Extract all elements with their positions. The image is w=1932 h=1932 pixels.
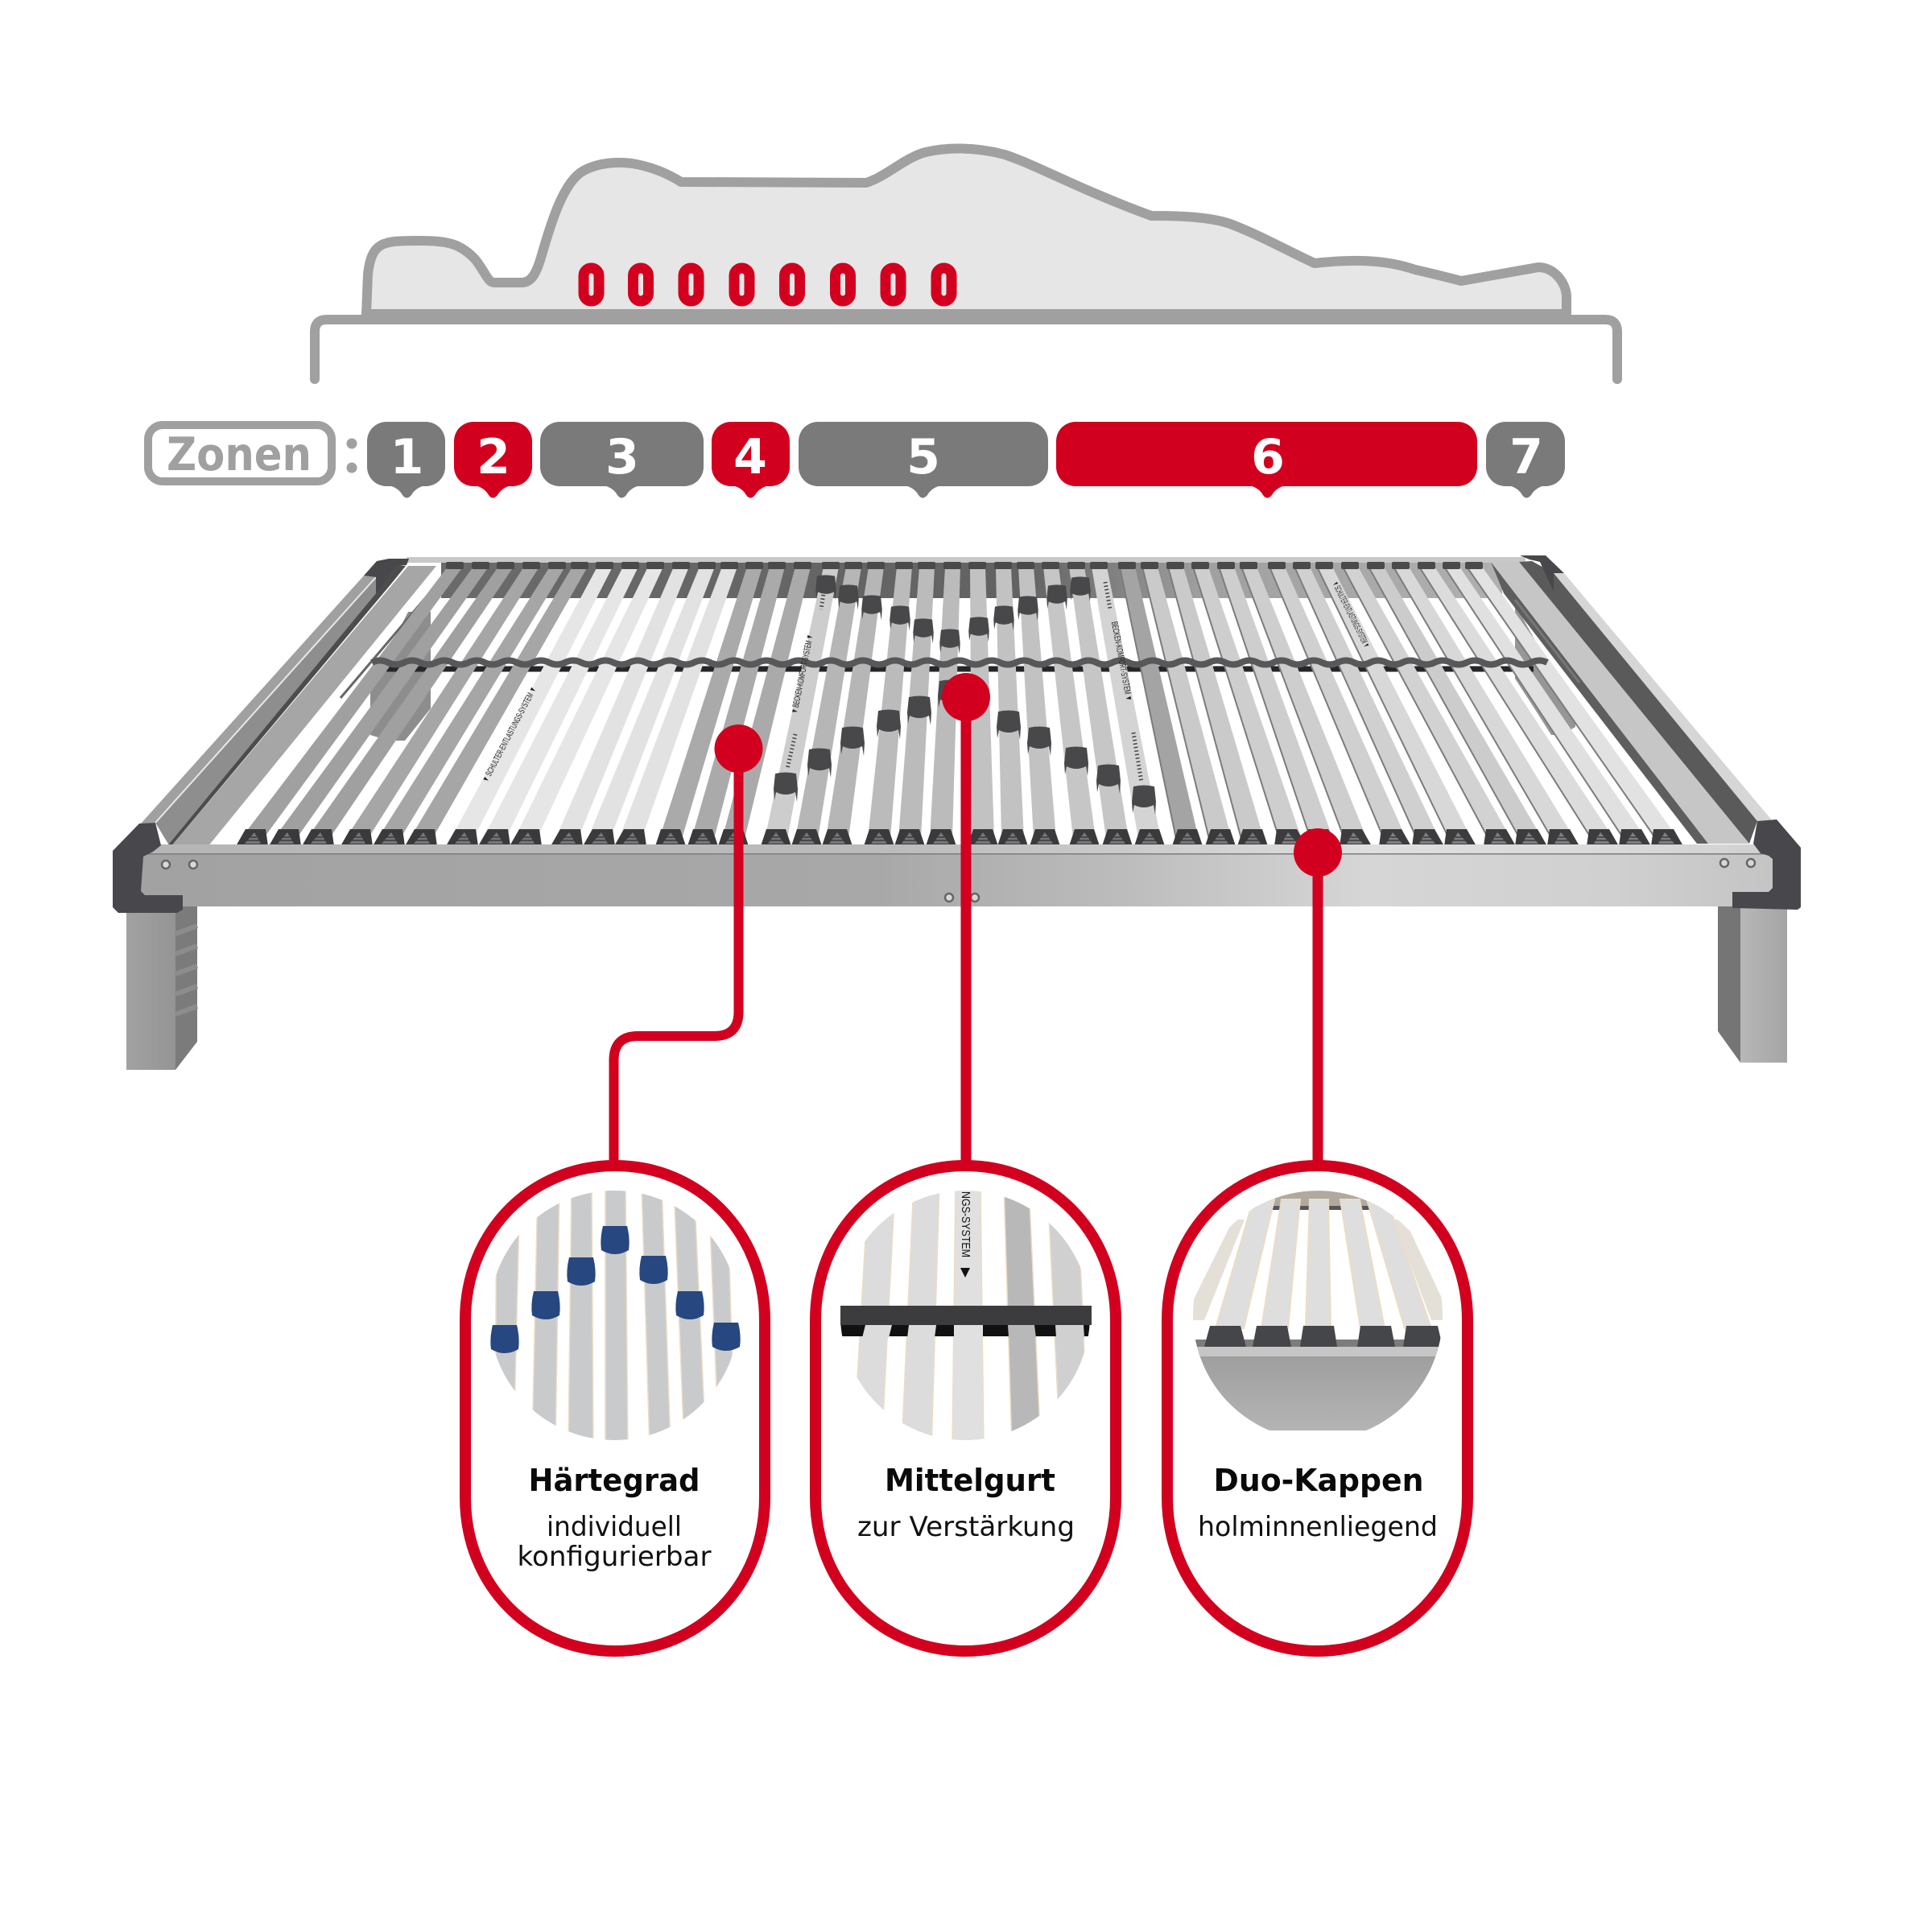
zone 1 [367, 422, 445, 497]
front slat caps [236, 829, 1683, 846]
back rail [407, 557, 1525, 563]
zone 2: 2 [477, 429, 510, 485]
left support bracket [370, 612, 431, 741]
slat edges [1120, 567, 1656, 839]
zone 2 [454, 422, 532, 497]
zone 4: 4 [733, 429, 767, 485]
heading: Mittelgurt [885, 1463, 1055, 1498]
photo: belt across slats [840, 1183, 1092, 1449]
left corner cap [113, 823, 183, 913]
rail screws [162, 859, 1755, 902]
ruler ticks [787, 582, 1141, 782]
back crossbar [441, 562, 1502, 598]
zone 7 [1486, 422, 1565, 497]
back slat caps [446, 562, 1483, 569]
description: konfigurierbar [517, 1541, 712, 1573]
back right corner [1520, 555, 1564, 592]
zone 4 [712, 422, 790, 497]
photo: blue clips [490, 1226, 741, 1353]
right support bracket [1515, 604, 1575, 735]
description: holminnenliegend [1198, 1511, 1438, 1543]
zone 6 [1056, 422, 1477, 497]
heading: Duo-Kappen [1214, 1463, 1423, 1498]
slats [241, 567, 1678, 839]
right corner cap [1732, 819, 1801, 910]
mattress profile [366, 148, 1567, 314]
callout line: Duo-Kappen [1294, 828, 1342, 1164]
belt [840, 1306, 1092, 1325]
zone 5: 5 [906, 429, 940, 485]
front rail [141, 844, 1774, 906]
zone 7: 7 [1509, 429, 1543, 485]
bed base bracket [315, 320, 1617, 379]
callout line: Mittelgurt [942, 673, 990, 1164]
slat labels [481, 580, 1371, 784]
description [517, 1511, 712, 1573]
centre belt [372, 660, 1547, 665]
hardness sliders [774, 575, 1156, 815]
callout line: Härtegrad [613, 724, 763, 1164]
description: individuell [547, 1511, 682, 1543]
zone 3: 3 [605, 429, 639, 485]
right side rail [1491, 561, 1773, 844]
description: zur Verstärkung [857, 1511, 1075, 1543]
left leg [126, 906, 197, 1070]
slat labels: BECKEN-KOMFORT-SYSTEM ▼ [1109, 621, 1133, 702]
zone 6: 6 [1251, 429, 1285, 485]
panel: Härtegrad [465, 1166, 765, 1651]
slatted bed frame: ▼ SCHULTER-ENTLASTUNGS-SYSTEM ▼ [1330, 580, 1371, 650]
zone 5 [799, 422, 1048, 497]
back left corner [364, 559, 409, 593]
photo: duo caps on the rail [1183, 1190, 1452, 1430]
left side rail [141, 564, 436, 847]
zone 1: 1 [390, 429, 423, 485]
photo: slats [495, 1183, 735, 1449]
panel: Mittelgurt [815, 1166, 1116, 1651]
belt shadow [386, 667, 1534, 671]
slat labels: ▼ BECKEN-KOMFORT-SYSTEM ▼ [790, 634, 815, 715]
slat label: NGS-SYSTEM [959, 1191, 972, 1257]
zones label: Zonen [167, 428, 312, 481]
zone 3 [540, 422, 704, 497]
slat labels: ▼ SCHULTER-ENTLASTUNGS-SYSTEM ▼ [481, 685, 539, 784]
panel: Duo-Kappen [1167, 1166, 1468, 1651]
right leg [1718, 906, 1787, 1063]
slatted bed frame [113, 555, 1801, 1070]
heading: Härtegrad [528, 1463, 700, 1498]
red pressure markers [584, 268, 952, 301]
